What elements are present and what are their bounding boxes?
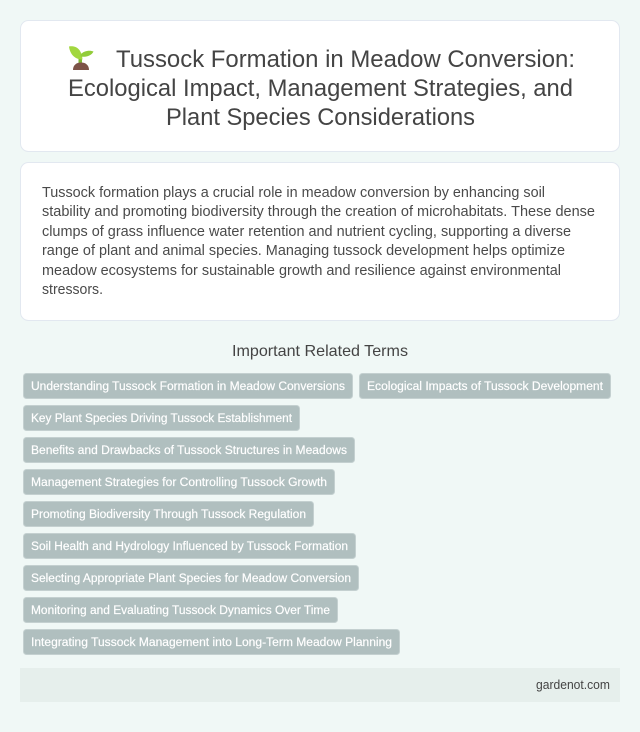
tag: understanding tussock formation <box>24 374 352 398</box>
tag: promoting biodiversity <box>24 502 314 526</box>
tag: management strategies: Management Strategies for Controlling Tussock Growth <box>31 475 327 489</box>
title <box>68 46 575 131</box>
tag: ecological impacts <box>360 374 610 398</box>
tag: integrating tussock management: Integrating Tussock Management into Long-Term Meadow Planning <box>31 635 392 649</box>
text block: description: range of plant and animal species. Managing tussock development helps optimize <box>42 243 565 259</box>
text block: description: stability and promoting biodiversity through the creation of microhabitats. These dense <box>42 204 595 220</box>
tag: selecting plant species: Selecting Appropriate Plant Species for Meadow Conversion <box>31 571 351 585</box>
tag: key plant species: Key Plant Species Driving Tussock Establishment <box>31 411 293 425</box>
heading: important related terms: Important Related Terms <box>232 343 408 360</box>
title: Ecological Impact, Management Strategies, and <box>68 75 573 102</box>
title: Tussock Formation in Meadow Conversion: <box>116 46 575 73</box>
tag: monitoring and evaluating <box>24 598 338 622</box>
tag: soil health <box>24 534 356 558</box>
text block: description <box>42 185 595 298</box>
title: Plant Species Considerations <box>166 104 475 131</box>
tag: key plant species <box>24 406 300 430</box>
text block: description: stressors. <box>42 282 103 298</box>
text block: description: clumps of grass influence water retention and nutrient cycling, supporting a diverse <box>42 224 571 240</box>
tag: management strategies <box>24 470 334 494</box>
icon: seedling <box>69 46 94 70</box>
tag: benefits and drawbacks: Benefits and Drawbacks of Tussock Structures in Meadows <box>31 443 347 457</box>
panel: description <box>20 162 620 320</box>
footer: gardenot.com <box>536 677 610 692</box>
term tags <box>24 374 610 654</box>
panel: header <box>20 20 620 152</box>
text block: description: meadow ecosystems for sustainable growth and resilience against environmental <box>42 263 561 279</box>
tag: benefits and drawbacks <box>24 438 354 462</box>
footer <box>20 668 620 702</box>
text block: description: Tussock formation plays a crucial role in meadow conversion by enhancing soil <box>42 185 545 201</box>
tag: promoting biodiversity: Promoting Biodiversity Through Tussock Regulation <box>31 507 306 521</box>
tag: understanding tussock formation: Understanding Tussock Formation in Meadow Conversions <box>31 379 345 393</box>
tag: integrating tussock management <box>24 630 400 654</box>
tag: ecological impacts: Ecological Impacts of Tussock Development <box>367 379 604 393</box>
tag: monitoring and evaluating: Monitoring and Evaluating Tussock Dynamics Over Time <box>31 603 330 617</box>
tag: soil health: Soil Health and Hydrology Influenced by Tussock Formation <box>31 539 348 553</box>
tag: selecting plant species <box>24 566 358 590</box>
